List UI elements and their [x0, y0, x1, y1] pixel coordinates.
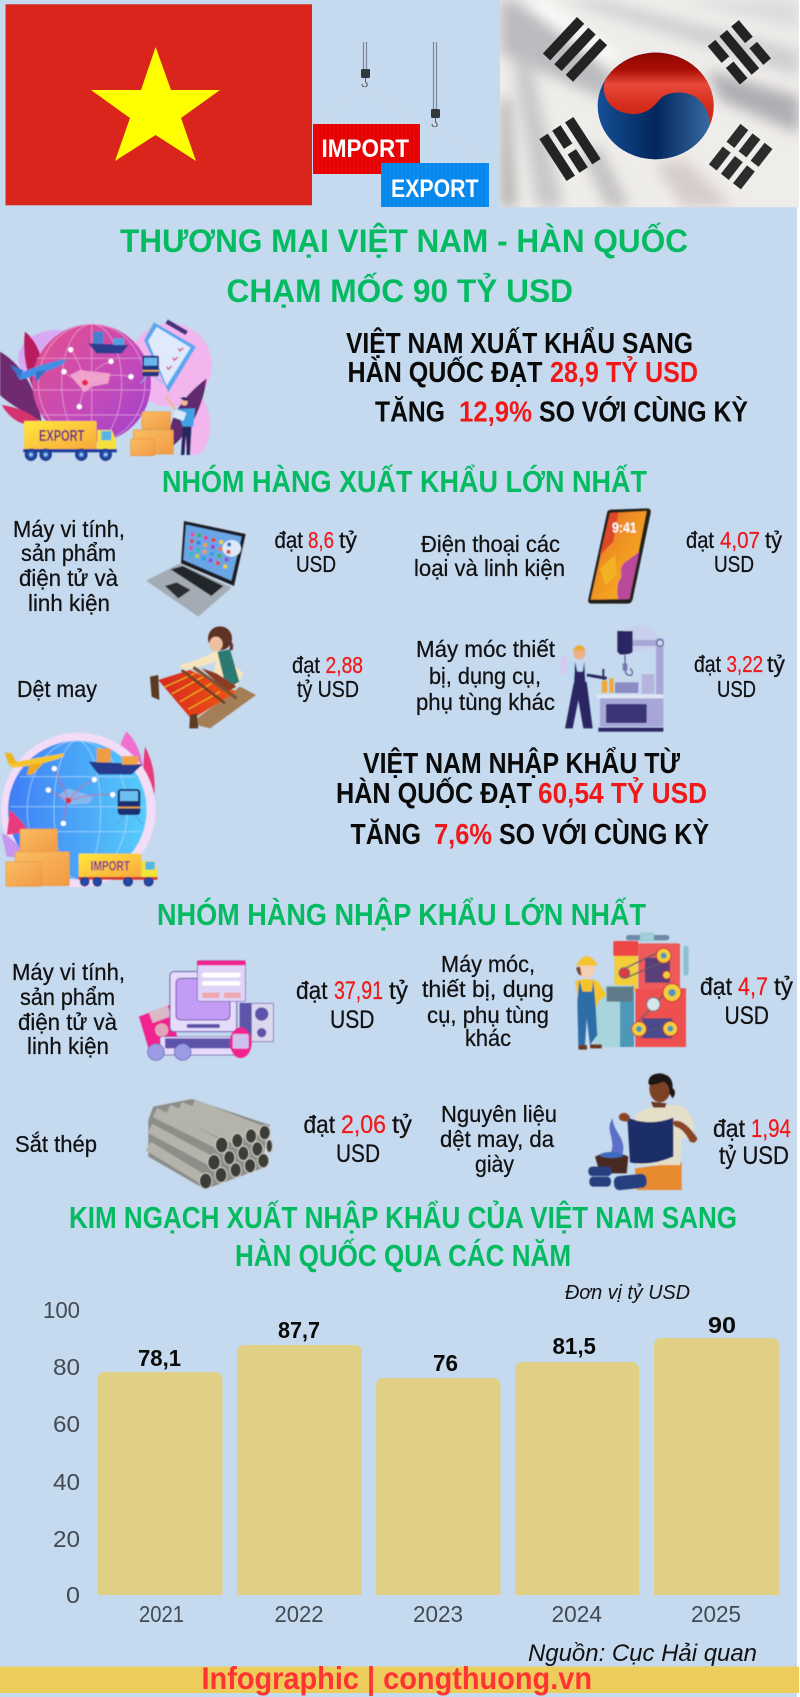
y axis labels	[43, 1297, 80, 1608]
import item: textile materials	[440, 1073, 791, 1191]
label: giày	[475, 1151, 514, 1177]
value: tỷ	[774, 973, 793, 1001]
bar 2021: 78,1	[138, 1345, 181, 1371]
import container: IMPORT	[322, 135, 409, 163]
y axis labels: 0	[66, 1582, 80, 1608]
value: tỷ	[767, 651, 785, 677]
value: tỷ	[339, 527, 357, 553]
trigrams	[539, 17, 772, 189]
bar 2025: 2025	[691, 1601, 741, 1627]
import headline	[336, 748, 709, 851]
label	[422, 951, 554, 1051]
label: Máy vi tính,	[13, 516, 125, 542]
label: dệt may, da	[440, 1126, 555, 1152]
icon: weaver	[150, 626, 256, 728]
bar 2021	[98, 1345, 222, 1627]
bar 2022: 2022	[274, 1601, 324, 1627]
truck	[78, 854, 157, 886]
main title: THƯƠNG MẠI VIỆT NAM - HÀN QUỐC	[120, 221, 688, 259]
export item: machinery	[416, 625, 785, 732]
import headline: HÀN QUỐC ĐẠT	[336, 777, 533, 810]
label: sản phẩm	[21, 540, 116, 566]
import headline: 7,6%	[434, 819, 492, 851]
import item: machinery	[422, 932, 793, 1051]
export item: computers	[13, 516, 357, 617]
import headline: VIỆT NAM NHẬP KHẨU TỪ	[363, 748, 680, 780]
bar 2024: 81,5	[552, 1333, 596, 1359]
y axis labels: 80	[53, 1354, 80, 1380]
footer band: Infographic | congthuong.vn	[202, 1660, 592, 1696]
unit note: Đơn vị tỷ USD	[565, 1282, 690, 1304]
export headline: TĂNG	[375, 396, 445, 428]
value: 4,7	[738, 973, 768, 1001]
bar 2023: 76	[433, 1350, 458, 1376]
y axis labels: 20	[53, 1526, 80, 1552]
icon: smartphone: 9:41	[612, 520, 637, 536]
boxes	[6, 829, 69, 886]
icon: machine operator	[560, 625, 663, 732]
y axis labels: 40	[53, 1469, 80, 1495]
export item: textiles	[17, 626, 363, 728]
plane	[5, 752, 64, 775]
value: USD	[330, 1006, 374, 1034]
label: bị, dụng cụ,	[429, 663, 541, 689]
header banner	[6, 0, 799, 207]
icon: laptop	[146, 521, 246, 617]
export headline: HÀN QUỐC ĐẠT	[348, 356, 543, 389]
plane	[10, 359, 65, 383]
value	[296, 977, 408, 1034]
truck	[23, 421, 117, 460]
icon: retro computer	[139, 961, 273, 1060]
footer band	[0, 1660, 799, 1696]
label: Dệt may	[17, 676, 97, 702]
label: điện tử và	[18, 1009, 118, 1035]
person	[166, 396, 195, 455]
label	[416, 636, 555, 715]
value	[274, 527, 357, 577]
label: linh kiện	[27, 1033, 109, 1059]
value: đạt	[274, 527, 303, 553]
icon: smartphone	[588, 508, 651, 604]
label: linh kiện	[28, 590, 110, 616]
value: đạt	[700, 973, 732, 1001]
value: 37,91	[334, 977, 383, 1005]
label: loại và linh kiện	[414, 555, 565, 581]
value: tỷ	[765, 527, 782, 553]
bar 2022	[237, 1317, 362, 1627]
label: điện tử và	[19, 565, 119, 591]
value: đạt	[686, 527, 714, 553]
export headline	[346, 328, 748, 428]
bar 2023	[376, 1350, 500, 1627]
icon: steel pipes	[148, 1099, 273, 1189]
crane with import and export containers	[313, 42, 489, 207]
label: khác	[465, 1025, 511, 1051]
import item: computers	[12, 959, 408, 1060]
value	[292, 652, 363, 702]
bar 2021: 2021	[139, 1601, 184, 1627]
value: tỷ USD	[719, 1142, 789, 1170]
bar 2025	[654, 1312, 779, 1627]
value: đạt	[296, 977, 328, 1005]
bar 2024	[515, 1333, 639, 1627]
label	[440, 1101, 557, 1177]
label	[13, 516, 125, 616]
label: Sắt thép	[15, 1131, 97, 1157]
value	[700, 973, 793, 1030]
value	[304, 1111, 413, 1168]
import container	[313, 124, 420, 174]
bar 2024: 2024	[552, 1601, 602, 1627]
value: tỷ	[392, 1111, 413, 1139]
value: USD	[714, 551, 754, 577]
heading: largest import groups: NHÓM HÀNG NHẬP KHẨU LỚN NHẤT	[157, 896, 646, 932]
value: USD	[717, 676, 756, 702]
value	[694, 651, 785, 702]
label: Máy vi tính,	[12, 959, 125, 985]
import headline: 60,54 TỶ USD	[538, 777, 707, 810]
truck: IMPORT	[91, 857, 130, 873]
value: đạt	[304, 1111, 335, 1139]
main title: CHẠM MỐC 90 TỶ USD	[226, 271, 573, 309]
label: phụ tùng khác	[416, 689, 555, 715]
y axis labels: 100	[43, 1297, 80, 1323]
ship	[89, 748, 143, 774]
clipboard	[144, 319, 196, 392]
value: đạt	[694, 651, 721, 677]
value: 3,22	[726, 651, 763, 677]
y axis labels: 60	[53, 1411, 80, 1437]
export headline: 28,9 TỶ USD	[550, 356, 698, 389]
value: USD	[336, 1140, 380, 1168]
label: Máy móc thiết	[416, 636, 555, 662]
icon: person dyeing indigo cloth	[588, 1073, 697, 1191]
import item: steel	[15, 1099, 413, 1189]
value: đạt	[713, 1115, 745, 1143]
South Korea flag	[500, 0, 799, 207]
label	[414, 531, 565, 581]
export container: EXPORT	[391, 175, 478, 203]
value: tỷ	[389, 977, 408, 1005]
label: sản phẩm	[20, 984, 115, 1010]
boxes	[131, 412, 173, 456]
taegeuk symbol	[598, 53, 714, 159]
source note: Nguồn: Cục Hải quan	[528, 1640, 757, 1667]
export headline: VIỆT NAM XUẤT KHẨU SANG	[346, 328, 693, 360]
main title	[120, 221, 688, 309]
value	[686, 527, 782, 577]
bar chart	[43, 1297, 779, 1627]
icon: factory machine and worker	[575, 932, 689, 1050]
value: USD	[724, 1002, 769, 1030]
import headline: SO VỚI CÙNG KỲ	[499, 819, 709, 851]
train	[141, 356, 162, 383]
icon: import globe with truck	[1, 732, 157, 887]
chart heading	[69, 1199, 737, 1273]
truck: EXPORT	[39, 428, 84, 445]
label: thiết bị, dụng	[422, 976, 554, 1002]
icon: export globe with truck	[0, 319, 212, 460]
chart heading: HÀN QUỐC QUA CÁC NĂM	[235, 1237, 571, 1273]
export headline: 12,9%	[459, 396, 532, 428]
ship	[88, 332, 128, 353]
bar 2025: 90	[708, 1312, 736, 1338]
value: USD	[296, 551, 336, 577]
value: 4,07	[720, 527, 760, 553]
bar 2022: 87,7	[278, 1317, 320, 1343]
label: Nguyên liệu	[441, 1101, 557, 1127]
label: cụ, phụ tùng	[427, 1002, 549, 1028]
train	[117, 789, 143, 824]
value: đạt	[292, 652, 320, 678]
value: 2,06	[341, 1111, 386, 1139]
heading: largest export groups: NHÓM HÀNG XUẤT KHẨU LỚN NHẤT	[162, 463, 647, 499]
export headline: SO VỚI CÙNG KỲ	[539, 396, 748, 428]
import headline: TĂNG	[350, 819, 421, 851]
Vietnam flag	[6, 4, 312, 205]
value: tỷ USD	[297, 676, 359, 702]
value: 8,6	[308, 527, 334, 553]
label	[12, 959, 125, 1059]
value: 1,94	[751, 1115, 791, 1143]
value	[713, 1115, 791, 1170]
value: 2,88	[326, 652, 363, 678]
bar 2023: 2023	[413, 1601, 463, 1627]
label: Máy móc,	[441, 951, 535, 977]
export container	[381, 163, 489, 207]
label: Điện thoại các	[421, 531, 560, 557]
export item: phones	[414, 508, 782, 604]
